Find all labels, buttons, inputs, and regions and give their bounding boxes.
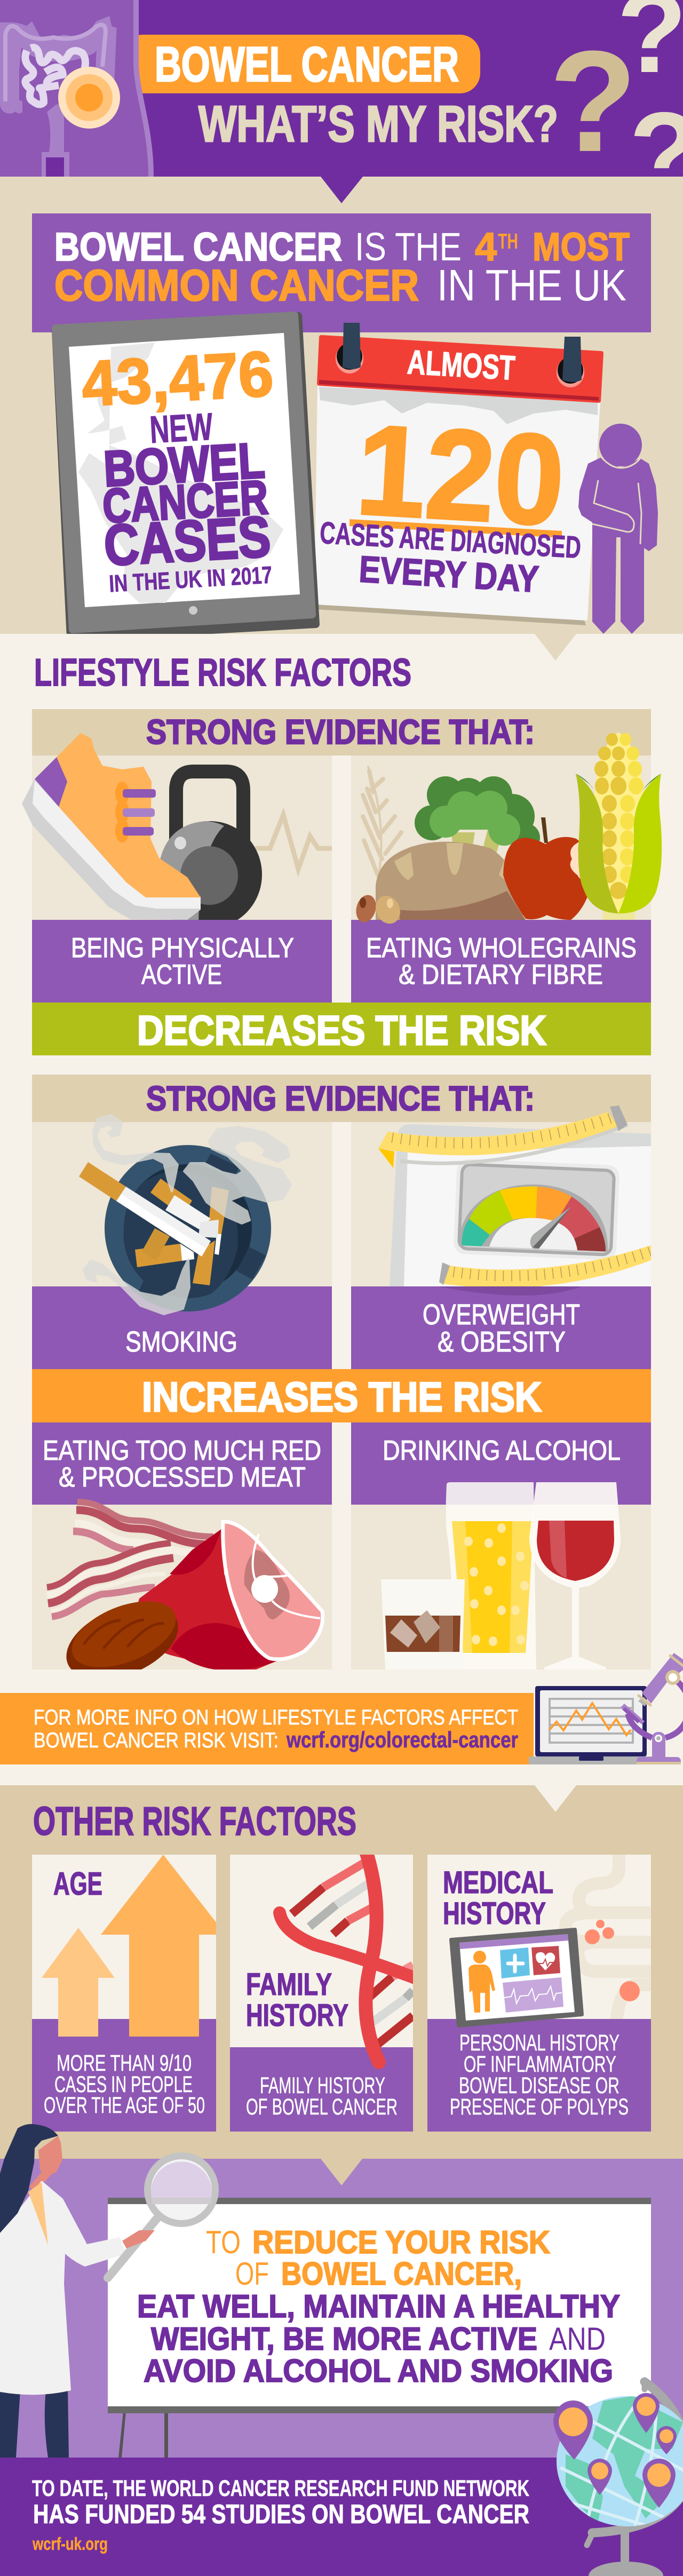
whiteboard with advice: REDUCE YOUR RISK <box>252 2224 550 2260</box>
title pill: bowel cancer <box>123 35 480 93</box>
icon: calendar 120 cases: EVERY DAY <box>358 548 540 600</box>
icon: person holding stomach <box>578 424 658 634</box>
cigarette butts <box>79 1162 229 1285</box>
icon: trainer and kettlebell <box>22 733 332 928</box>
whiteboard with advice <box>108 2198 651 2458</box>
banner: decreases the risk <box>32 1003 651 1055</box>
card: age <box>32 1855 226 2132</box>
whiteboard with advice: BOWEL CANCER, <box>281 2256 522 2292</box>
icon: laptop with chart <box>529 1686 657 1764</box>
icon: tablet 43,476 cases: 43,476 <box>80 338 275 420</box>
callout: more info: BOWEL CANCER RISK VISIT: <box>34 1729 279 1752</box>
label: overweight and obesity: OVERWEIGHT <box>423 1299 580 1331</box>
card: medical history: HISTORY <box>443 1896 546 1931</box>
banner: increases the risk: INCREASES THE RISK <box>142 1373 542 1420</box>
icon: polyps <box>585 1920 640 2001</box>
banner: decreases the risk: DECREASES THE RISK <box>137 1007 546 1054</box>
card: family history: HISTORY <box>246 1998 348 2033</box>
card: family history: OF BOWEL CANCER <box>246 2094 398 2120</box>
heading: 4th most common cancer: IN THE UK <box>437 260 626 310</box>
heading: 4th most common cancer: IS THE <box>355 225 462 269</box>
card: medical history: OF INFLAMMATORY <box>464 2052 616 2077</box>
panel: other risk factors <box>0 1785 683 2159</box>
icon: question marks <box>555 0 683 169</box>
icon: globe with map pins <box>553 2381 683 2576</box>
heading: strong evidence: STRONG EVIDENCE THAT: <box>146 1079 535 1118</box>
whiteboard with advice: TO <box>206 2224 241 2260</box>
map of the UK <box>78 343 283 603</box>
icon: calendar 120 cases <box>316 323 601 625</box>
icon: rising arrows <box>42 1855 226 2037</box>
icon: calendar 120 cases: 120 <box>353 397 568 552</box>
callout: more info <box>0 1693 534 1764</box>
card: family history <box>230 1851 416 2132</box>
panel: red meat: & PROCESSED MEAT <box>59 1462 306 1493</box>
card: medical history: BOWEL DISEASE OR <box>459 2073 620 2098</box>
heading: 4th most common cancer: BOWEL CANCER <box>54 225 342 269</box>
icon: tablet 43,476 cases: IN THE UK IN 2017 <box>108 561 273 598</box>
icon: torso with colon and tumour <box>0 0 154 177</box>
panel: drinking alcohol <box>351 1422 651 1669</box>
whiteboard with advice: EAT WELL, MAINTAIN A HEALTHY <box>137 2288 620 2324</box>
whiteboard with advice: AVOID ALCOHOL AND SMOKING <box>144 2353 613 2389</box>
panel: red meat <box>32 1422 332 1695</box>
heading: 4th most common cancer: TH <box>498 229 518 253</box>
heading: 4th most common cancer: 4 <box>475 225 497 269</box>
card: family history: FAMILY <box>246 1967 332 2002</box>
title pill: bowel cancer: BOWEL CANCER <box>155 37 459 92</box>
binder pins <box>336 323 584 387</box>
icon: scientist with magnifying glass <box>0 2124 219 2458</box>
card: family history: FAMILY HISTORY <box>260 2073 385 2098</box>
card: medical history: MEDICAL <box>443 1865 553 1900</box>
label: being physically active: ACTIVE <box>141 959 222 990</box>
whiteboard with advice: WEIGHT, BE MORE ACTIVE <box>151 2321 537 2357</box>
panel: decreases the risk <box>22 709 662 1055</box>
label: being physically active <box>71 933 294 990</box>
icon: tablet 43,476 cases: NEW <box>149 406 214 451</box>
icon: microscope <box>621 1653 683 1764</box>
icon: question marks: ? <box>549 21 637 182</box>
callout: more info: FOR MORE INFO ON HOW LIFESTYLE FACTORS AFFECT <box>34 1706 518 1729</box>
label: overweight and obesity <box>423 1299 580 1358</box>
label: being physically active: BEING PHYSICALLY <box>71 933 294 964</box>
heading: 4th most common cancer: MOST <box>533 225 630 269</box>
icon: medical tablet <box>451 1929 582 2026</box>
panel: footer <box>0 2458 683 2576</box>
label: smoking: SMOKING <box>125 1326 237 1358</box>
icon: tablet 43,476 cases: CASES <box>102 504 272 578</box>
icon: bathroom scale with tape measure <box>378 1106 651 1295</box>
icon: wholegrains, bread, apple, broccoli, corn <box>353 732 662 928</box>
label: eating wholegrains and dietary fibre: & DIETARY FIBRE <box>399 959 603 990</box>
heading: lifestyle risk factors: LIFESTYLE RISK FACTORS <box>34 651 411 694</box>
label: eating wholegrains and dietary fibre <box>366 933 637 990</box>
panel: increases the risk <box>0 1075 683 2576</box>
whiteboard with advice: AND <box>549 2321 606 2357</box>
icon: tablet 43,476 cases: BOWEL <box>102 432 266 497</box>
icon: bacon, ham and burger <box>46 1499 324 1669</box>
map pins <box>553 2393 677 2508</box>
banner: increases the risk <box>32 1369 651 1422</box>
panel: footer: wcrf-uk.org <box>32 2534 108 2554</box>
panel: lifestyle section background <box>0 634 683 1785</box>
heading: strong evidence: STRONG EVIDENCE THAT: <box>146 712 535 751</box>
panel: footer: HAS FUNDED 54 STUDIES ON BOWEL CANCER <box>33 2499 529 2529</box>
icon: ashtray and cigarettes <box>79 1115 291 1314</box>
icon: tablet 43,476 cases <box>55 315 316 638</box>
label: eating wholegrains and dietary fibre: EATING WHOLEGRAINS <box>366 933 637 964</box>
card: age: MORE THAN 9/10 <box>57 2050 192 2076</box>
icon: beer, whisky and wine <box>381 1482 621 1669</box>
panel: drinking alcohol: DRINKING ALCOHOL <box>383 1435 621 1466</box>
icon: DNA helix <box>280 1851 416 2062</box>
card: medical history <box>427 1851 656 2132</box>
panel: reduce your risk <box>0 2124 683 2458</box>
icon: tablet 43,476 cases: CANCER <box>101 471 269 534</box>
panel: red meat: EATING TOO MUCH RED <box>43 1435 321 1466</box>
card: age: AGE <box>53 1866 102 1902</box>
heading: other risk factors: OTHER RISK FACTORS <box>33 1799 356 1843</box>
callout: more info: wcrf.org/colorectal-cancer <box>286 1727 518 1752</box>
header banner <box>0 0 683 177</box>
card: age: OVER THE AGE OF 50 <box>44 2093 205 2118</box>
panel: beige intro section <box>0 177 683 638</box>
icon: calendar 120 cases: ALMOST <box>406 343 516 387</box>
heading: 4th most common cancer <box>32 213 651 332</box>
card: age: CASES IN PEOPLE <box>54 2072 193 2097</box>
smoke <box>84 1115 291 1314</box>
whiteboard with advice: OF <box>235 2256 269 2292</box>
pointer arrow <box>321 177 363 203</box>
label: overweight and obesity: & OBESITY <box>438 1326 566 1358</box>
icon: intestine outline <box>566 1851 656 2022</box>
heading: 4th most common cancer: COMMON CANCER <box>54 260 419 310</box>
subtitle: what's my risk: WHAT’S MY RISK? <box>198 96 558 153</box>
